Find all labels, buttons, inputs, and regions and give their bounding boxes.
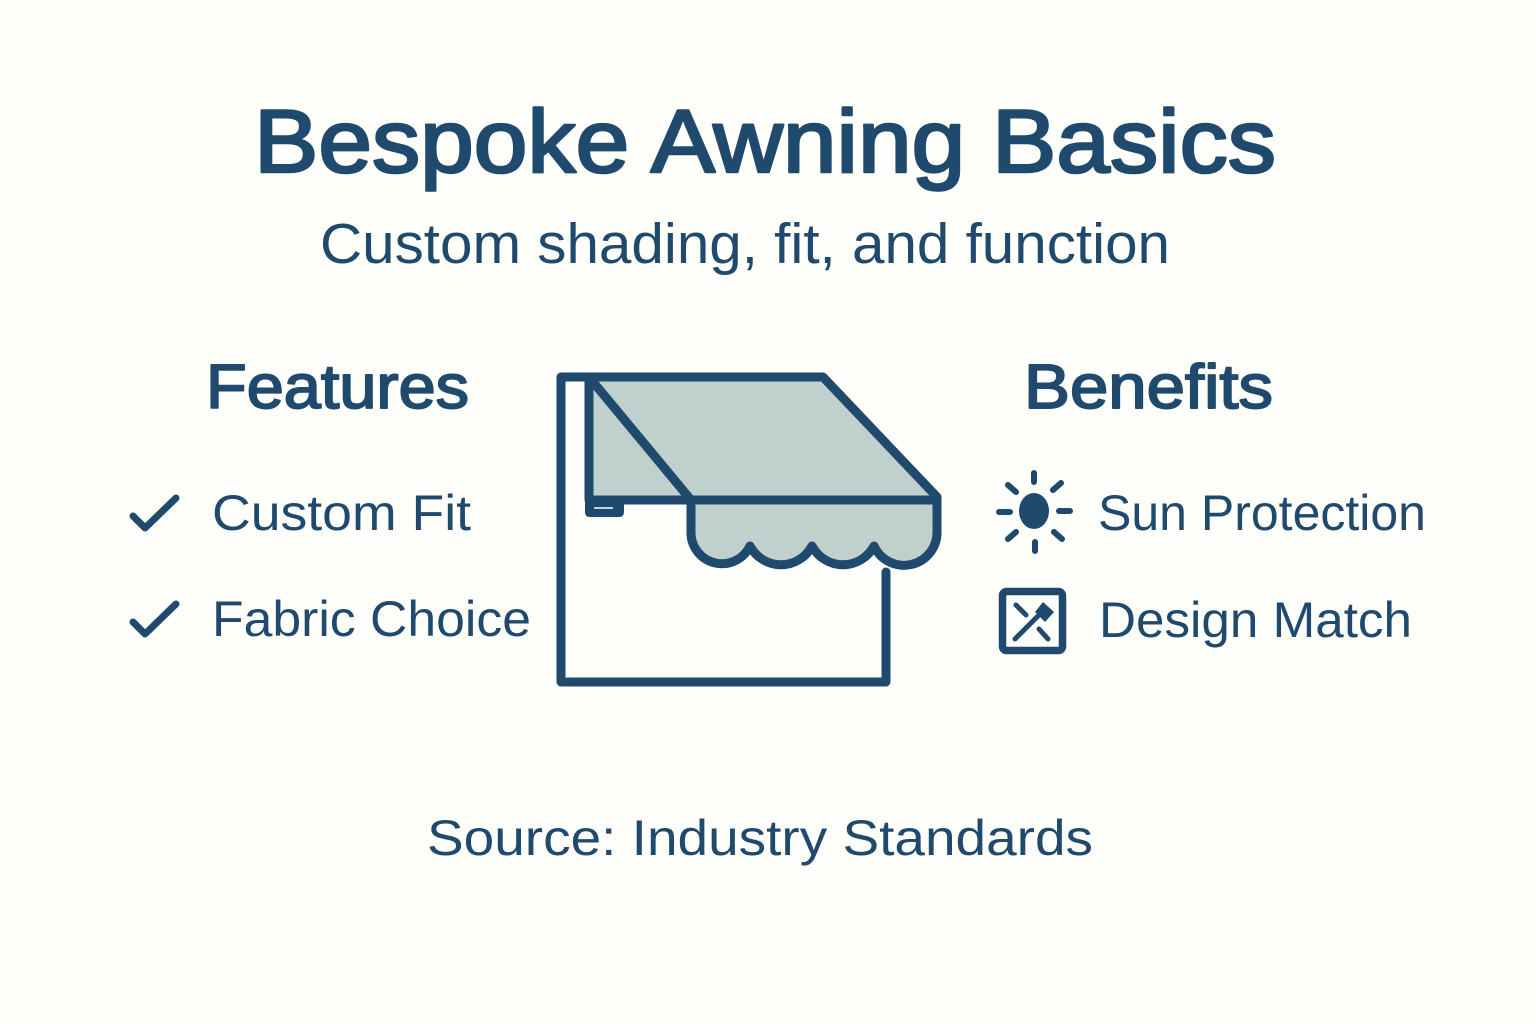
awning top canopy	[589, 377, 937, 500]
icon: sun	[999, 473, 1070, 551]
feature: fabric choice	[133, 591, 531, 647]
icon: check mark	[133, 604, 176, 634]
label: design match: Design Match	[1099, 592, 1412, 648]
scalloped valance	[691, 500, 937, 565]
label: fabric choice: Fabric Choice	[212, 591, 531, 647]
panel: benefits	[999, 353, 1426, 650]
icon: design tools box	[1002, 592, 1062, 650]
features heading: Features	[206, 353, 469, 422]
panel: features	[133, 353, 531, 647]
feature: custom fit	[133, 485, 471, 541]
icon: check mark	[133, 498, 176, 528]
wall outline	[561, 377, 886, 682]
title: Bespoke Awning Basics	[254, 91, 1276, 191]
label: sun protection: Sun Protection	[1098, 485, 1426, 541]
benefit: sun protection	[999, 473, 1426, 551]
illustration: awning on storefront	[561, 377, 937, 682]
label: custom fit: Custom Fit	[212, 485, 471, 541]
source note: Source: Industry Standards	[427, 810, 1093, 866]
subtitle: Custom shading, fit, and function	[320, 212, 1170, 276]
benefit: design match	[1002, 592, 1412, 650]
awning side panel	[589, 377, 691, 500]
benefits heading: Benefits	[1024, 353, 1273, 422]
mounting bracket	[585, 500, 624, 517]
